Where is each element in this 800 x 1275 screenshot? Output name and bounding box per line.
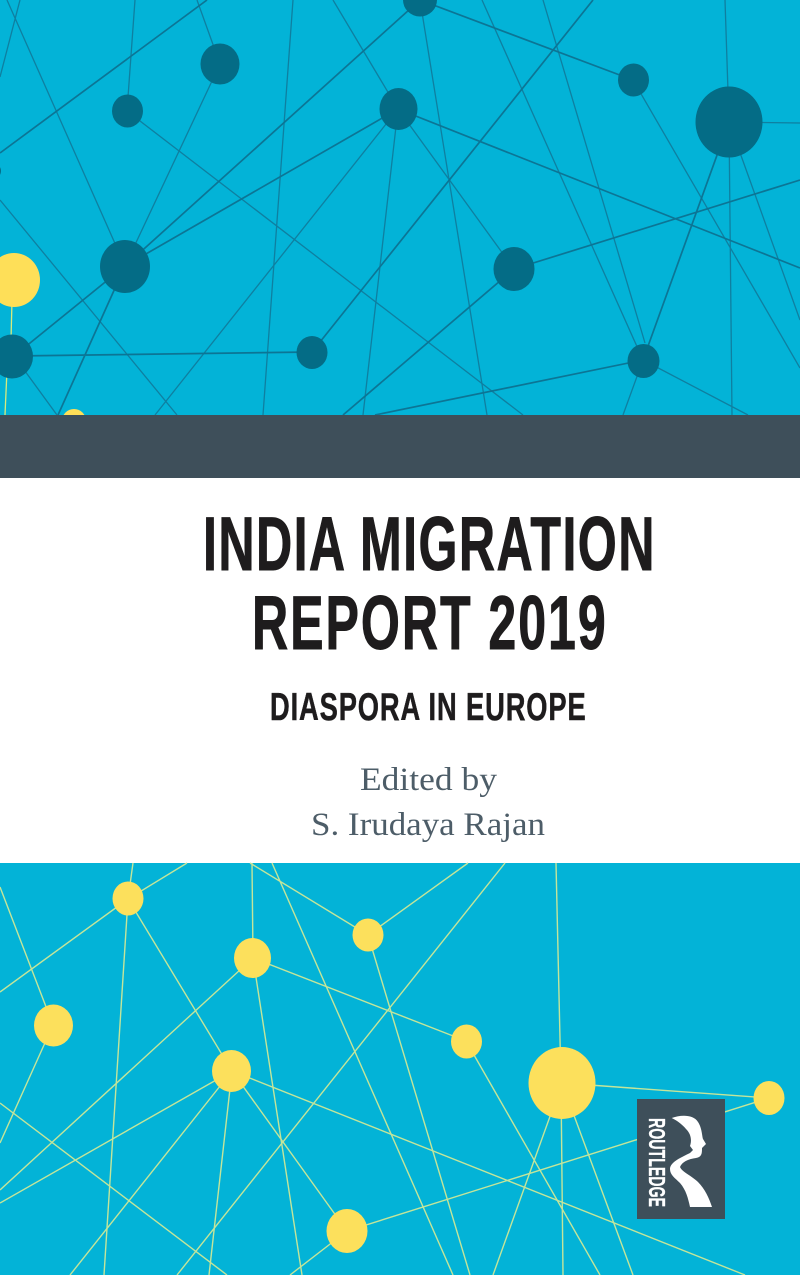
title	[203, 502, 654, 666]
logo mark: two faces forming an R	[670, 1116, 712, 1207]
publisher logo	[637, 1099, 725, 1219]
panel: top network illustration	[0, 0, 800, 433]
subtitle: DIASPORA IN EUROPE	[270, 686, 586, 729]
yellow nodes	[34, 882, 784, 1253]
title: INDIA MIGRATION	[203, 502, 654, 587]
editor credit: Edited by	[360, 762, 498, 798]
editor credit: S. Irudaya Rajan	[311, 807, 545, 843]
logo wordmark: ROUTLEDGE	[644, 1118, 670, 1207]
editor credit	[311, 762, 545, 843]
title: REPORT 2019	[252, 581, 606, 666]
yellow nodes	[0, 253, 86, 433]
dark band	[0, 415, 800, 478]
dark nodes	[0, 0, 762, 378]
panel: bottom network illustration	[0, 863, 800, 1275]
